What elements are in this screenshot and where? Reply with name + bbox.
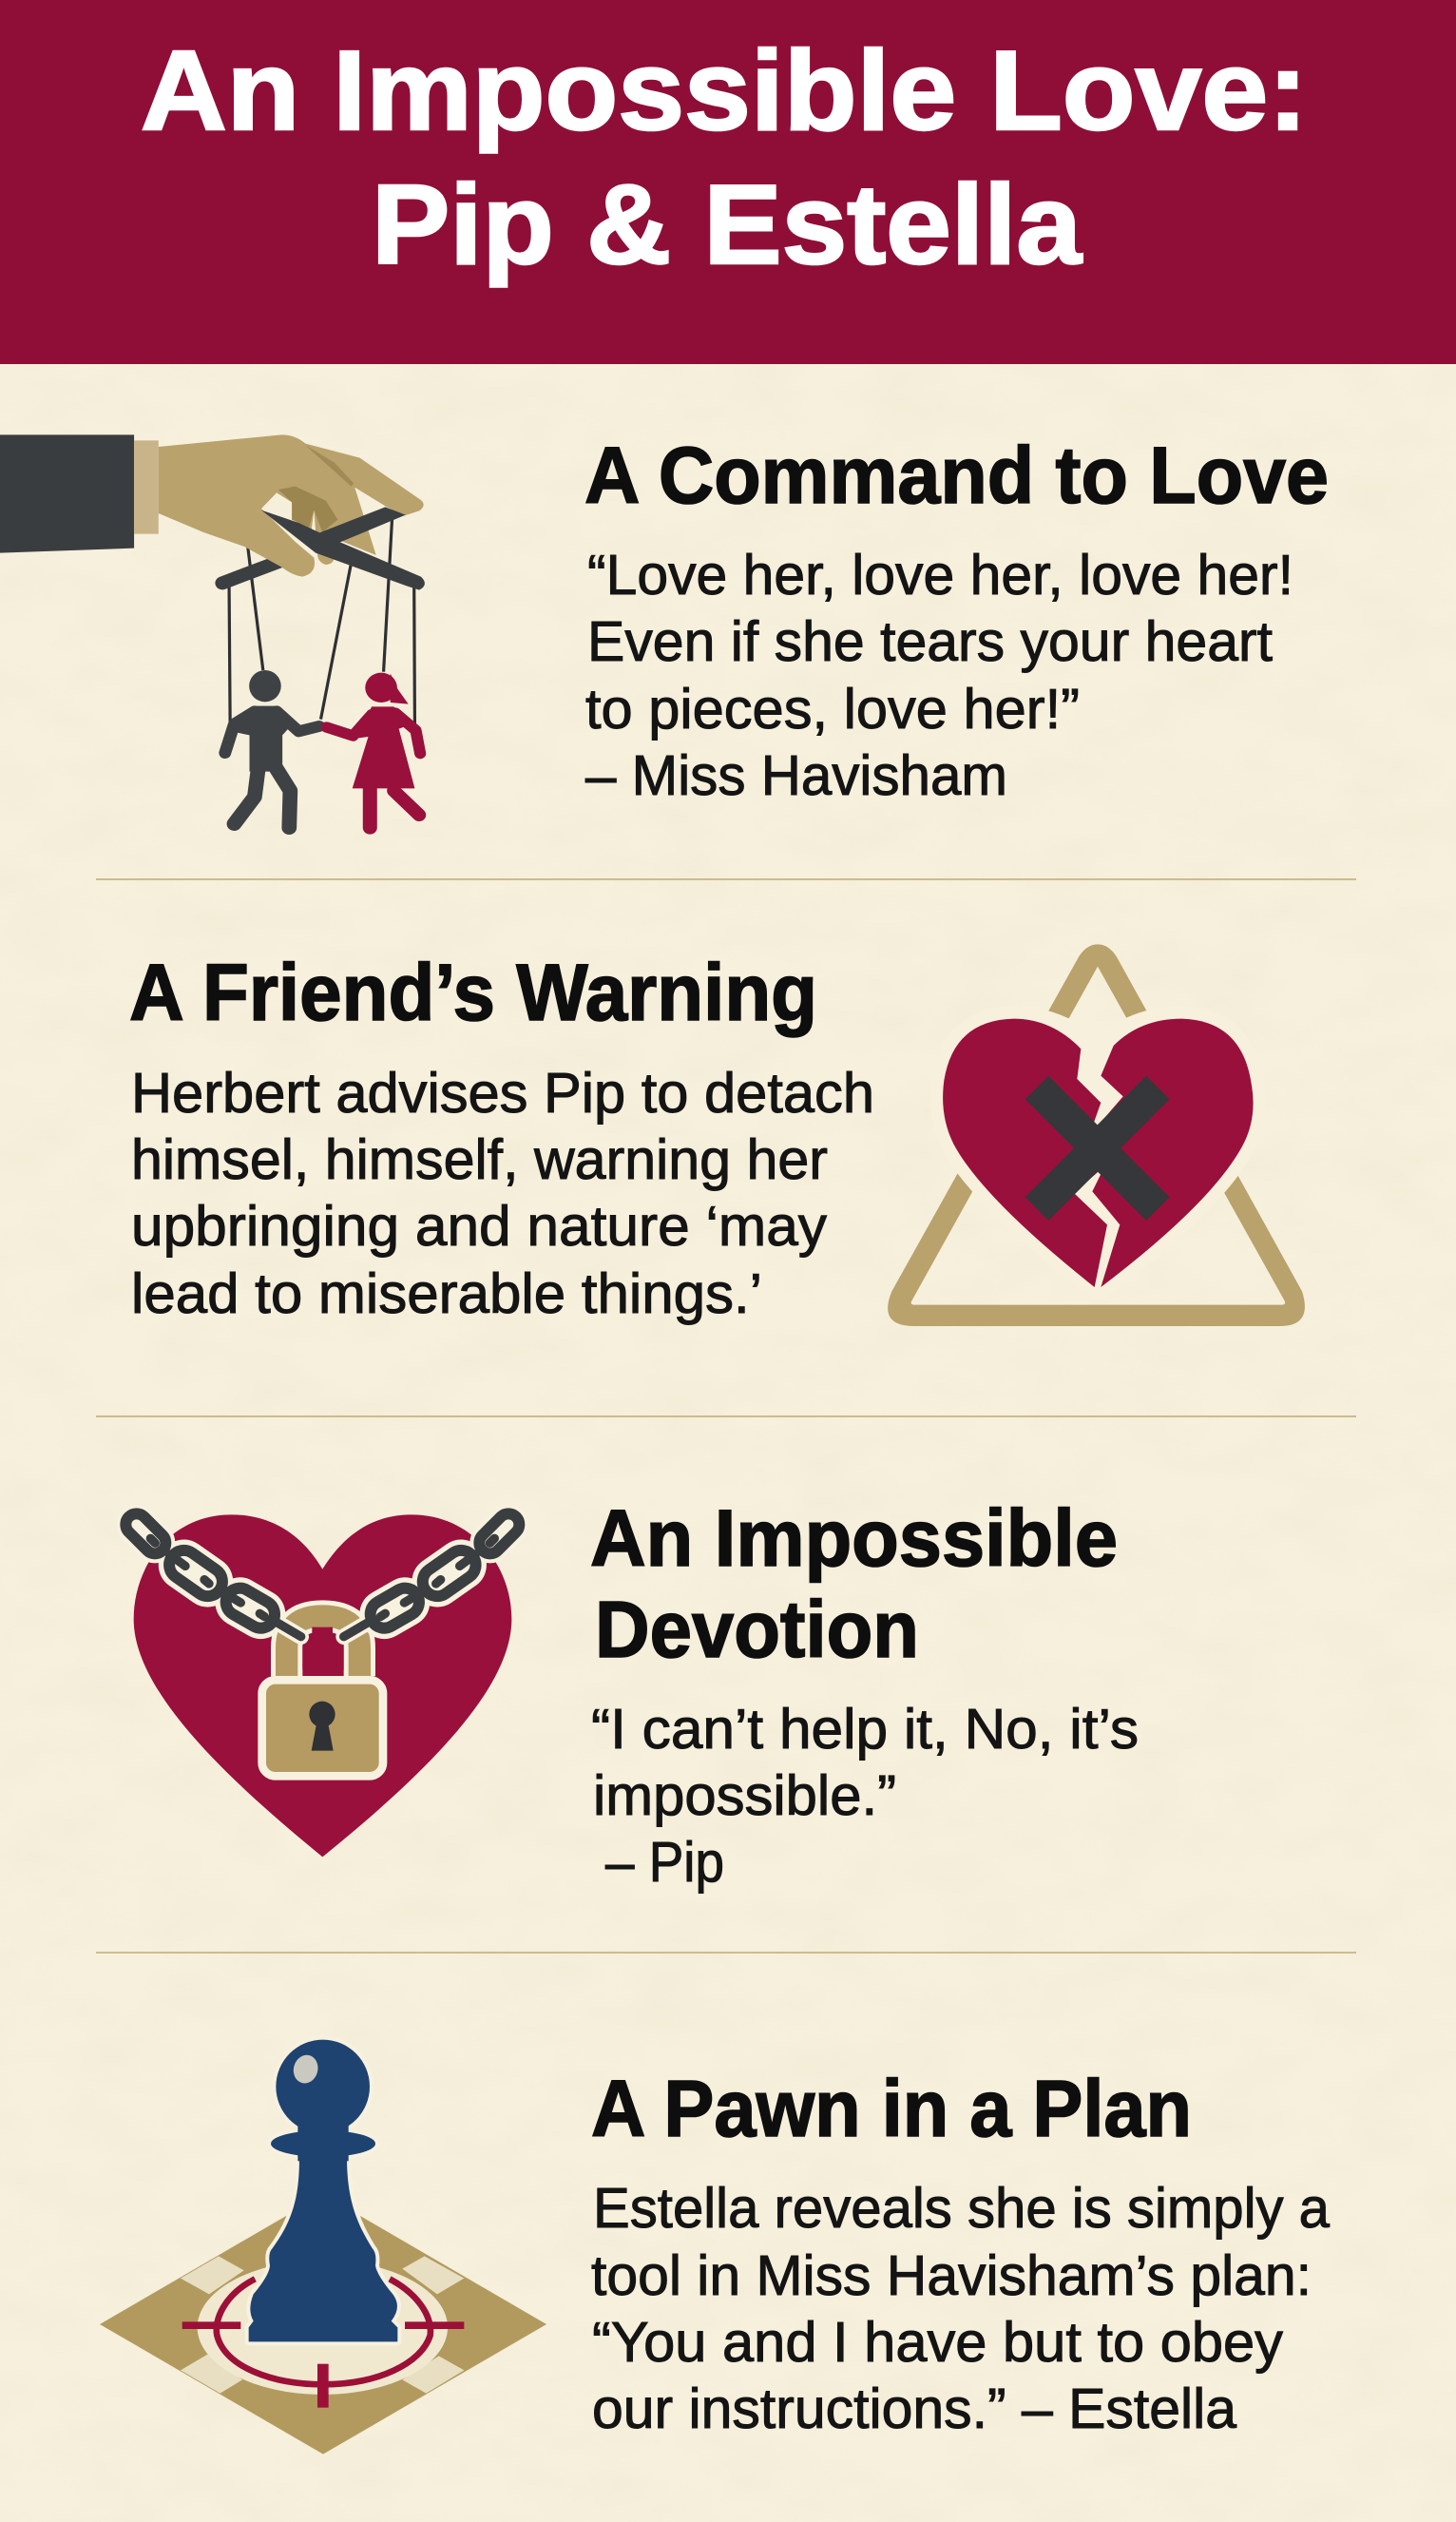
quote text: impossible.”	[593, 1764, 896, 1827]
right chain	[344, 1510, 524, 1637]
body text	[131, 1062, 874, 1325]
cuff	[134, 440, 159, 534]
keyhole	[309, 1702, 335, 1751]
puppet: girl	[327, 673, 420, 828]
board bands	[181, 2256, 464, 2394]
pawn	[249, 2040, 397, 2341]
quote text: to pieces, love her!”	[585, 678, 1080, 741]
panel: a command to love	[0, 431, 1329, 828]
quote text	[591, 1698, 1139, 1894]
body text: our instructions.” – Estella	[592, 2378, 1236, 2440]
heart gap	[943, 1019, 1254, 1287]
lock body	[262, 1680, 383, 1776]
heading: A Friend’s Warning	[129, 948, 817, 1037]
panel: a friend's warning	[129, 944, 1305, 1326]
warning triangle	[888, 944, 1305, 1326]
heading: A Pawn in a Plan	[591, 2064, 1192, 2153]
body text: Herbert advises Pip to detach	[131, 1062, 874, 1125]
target ring	[217, 2279, 431, 2384]
puppet: boy	[225, 670, 319, 828]
icon: pawn on target	[100, 2040, 546, 2455]
body text: himsel, himself, warning her	[131, 1128, 828, 1191]
body text: upbringing and nature ‘may	[131, 1195, 828, 1258]
quote text: “I can’t help it, No, it’s	[591, 1698, 1139, 1761]
quote text: Even if she tears your heart	[587, 610, 1273, 673]
icon: broken heart in warning triangle	[888, 944, 1305, 1326]
heart	[134, 1514, 511, 1857]
heading: An Impossible	[590, 1493, 1118, 1583]
body text	[591, 2177, 1330, 2440]
body text: Estella reveals she is simply a	[593, 2177, 1330, 2240]
chess board	[100, 2194, 546, 2455]
center spot	[198, 2261, 448, 2395]
quote text: “Love her, love her, love her!	[587, 544, 1293, 606]
target crosshairs	[182, 2321, 464, 2408]
heading: Devotion	[595, 1585, 919, 1674]
shackle opening	[302, 1627, 344, 1670]
heading	[590, 1493, 1118, 1674]
x mark	[1037, 1088, 1158, 1209]
body text: lead to miserable things.’	[131, 1262, 762, 1325]
title	[141, 28, 1308, 288]
broken heart	[943, 1019, 1254, 1287]
chain halo	[122, 1510, 524, 1637]
sleeve	[0, 434, 134, 553]
quote text	[585, 544, 1293, 807]
quote text: – Miss Havisham	[585, 744, 1007, 807]
header banner	[0, 0, 1456, 364]
icon: chained padlocked heart	[122, 1510, 524, 1857]
hand	[159, 434, 424, 577]
control bar left	[222, 559, 285, 583]
quote text: – Pip	[605, 1831, 724, 1894]
icon: hand controlling puppets	[0, 434, 425, 828]
control bars crossed	[261, 507, 425, 590]
left chain	[122, 1510, 301, 1637]
panel: a pawn in a plan	[100, 2040, 1330, 2455]
heading: A Command to Love	[584, 431, 1329, 520]
puppet strings	[229, 520, 414, 724]
body text: tool in Miss Havisham’s plan:	[591, 2244, 1312, 2307]
title: An Impossible Love:	[141, 28, 1308, 154]
title: Pip & Estella	[372, 162, 1082, 288]
panel: an impossible devotion	[122, 1493, 1139, 1894]
shackle	[287, 1616, 359, 1676]
body text: “You and I have but to obey	[592, 2311, 1283, 2374]
